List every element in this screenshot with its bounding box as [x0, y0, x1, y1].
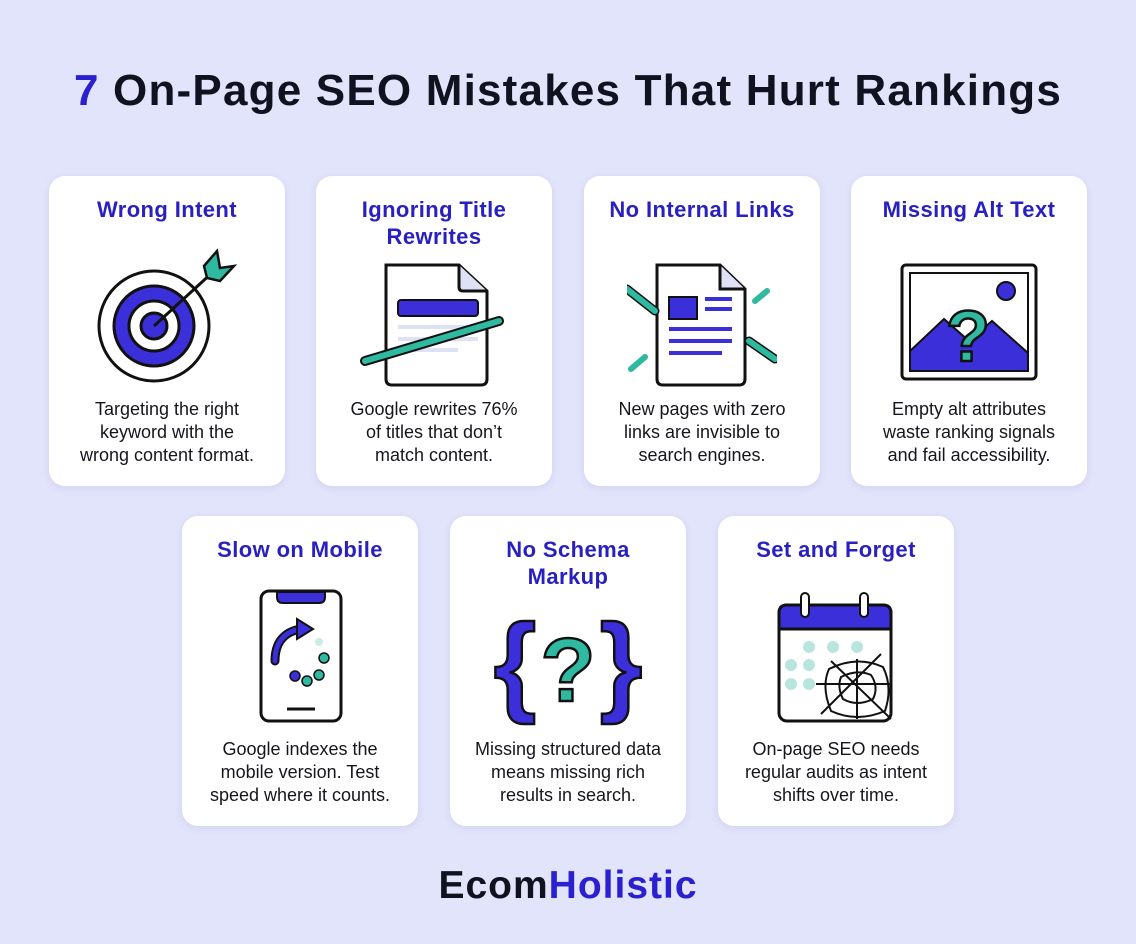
card: alt text: Missing Alt Text [883, 197, 1055, 222]
icon: phone [260, 590, 342, 722]
card: alt text: waste ranking signals [883, 422, 1055, 442]
card: wrong intent: keyword with the [100, 422, 234, 442]
icon: image with question [900, 264, 1038, 380]
card: alt text [851, 176, 1087, 486]
card: set and forget: shifts over time. [773, 785, 899, 805]
card: internal links: search engines. [638, 445, 766, 465]
card: internal links: New pages with zero [618, 399, 786, 419]
card: title rewrites: of titles that don’t [366, 422, 502, 442]
icon: document with strike [360, 264, 504, 386]
icon: braces question: ? [541, 621, 595, 721]
card: slow mobile [182, 516, 418, 826]
card: slow mobile: Google indexes the [222, 739, 378, 759]
card: wrong intent: Wrong Intent [97, 197, 237, 222]
icon: image with question: ? [946, 297, 990, 377]
card: alt text: Empty alt attributes [892, 399, 1046, 419]
icon: braces question [494, 602, 642, 726]
icon: braces question: { [494, 602, 536, 725]
card: internal links: No Internal Links [609, 197, 795, 222]
card: title rewrites: Google rewrites 76% [350, 399, 518, 419]
footer logo: EcomHolistic [438, 864, 698, 907]
card: schema: Missing structured data [475, 739, 661, 759]
icon: target [98, 248, 238, 382]
card: schema: means missing rich [491, 762, 645, 782]
card: schema: No Schema [506, 537, 630, 562]
card: schema [450, 516, 686, 826]
card: wrong intent: Targeting the right [95, 399, 239, 419]
icon: broken links document [627, 264, 777, 386]
card: title rewrites: match content. [375, 445, 493, 465]
icon: calendar cobweb [778, 592, 892, 722]
card: set and forget: regular audits as intent [745, 762, 927, 782]
card: internal links [584, 176, 820, 486]
card: schema: results in search. [500, 785, 636, 805]
card: slow mobile: Slow on Mobile [217, 537, 383, 562]
card: title rewrites [316, 176, 552, 486]
card: title rewrites: Rewrites [387, 224, 481, 249]
card: set and forget [718, 516, 954, 826]
card: internal links: links are invisible to [624, 422, 780, 442]
title: 7 On-Page SEO Mistakes That Hurt Rankings [74, 66, 1062, 115]
card: slow mobile: mobile version. Test [221, 762, 379, 782]
card: title rewrites: Ignoring Title [362, 197, 506, 222]
card: wrong intent [49, 176, 285, 486]
card: wrong intent: wrong content format. [80, 445, 254, 465]
card: schema: Markup [528, 564, 608, 589]
card: slow mobile: speed where it counts. [210, 785, 390, 805]
card: set and forget: Set and Forget [756, 537, 916, 562]
card: set and forget: On-page SEO needs [752, 739, 920, 759]
icon: braces question: } [600, 602, 642, 725]
card: alt text: and fail accessibility. [888, 445, 1050, 465]
